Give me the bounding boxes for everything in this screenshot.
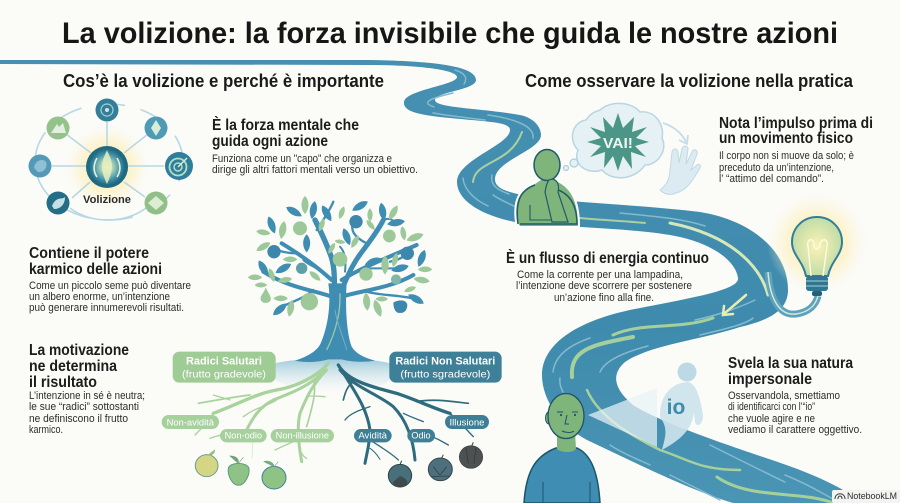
icon: hand bbox=[660, 146, 700, 194]
text block: impulso: un movimento fisico bbox=[719, 130, 853, 147]
volition diagram bbox=[28, 98, 193, 220]
observation cone bbox=[588, 388, 657, 447]
text block: impersonale: vediamo il carattere oggettivo. bbox=[728, 424, 862, 436]
pill: Non-illusione: Non-illusione bbox=[276, 431, 329, 441]
text block: impersonale: Osservandola, smettiamo bbox=[728, 390, 840, 402]
text block: potere karmico: può generare innumerevoli risultati. bbox=[29, 302, 184, 314]
trunk bbox=[295, 283, 375, 362]
apple: green bbox=[262, 461, 286, 489]
pill: Non-odio: Non-odio bbox=[225, 431, 262, 441]
panel: healthy roots label: (frutto gradevole) bbox=[182, 369, 266, 380]
text block: forza mentale bbox=[212, 117, 418, 176]
text block: forza mentale: guida ogni azione bbox=[212, 133, 328, 150]
text block: flusso: Come la corrente per una lampadina, bbox=[517, 269, 683, 281]
text block: motivazione bbox=[29, 342, 145, 436]
burst label: VAI! bbox=[603, 135, 633, 152]
text block: forza mentale: È la forza mentale che bbox=[212, 117, 359, 134]
figure: ghost self bbox=[660, 362, 703, 450]
panel: unhealthy roots label bbox=[389, 352, 502, 383]
node: top right bbox=[144, 116, 168, 140]
text block: potere karmico: karmico delle azioni bbox=[29, 261, 162, 278]
text block: forza mentale: Funziona come un "capo" che organizza e bbox=[212, 153, 392, 165]
pill: Odio: Odio bbox=[411, 431, 431, 441]
heading: right section: Come osservare la volizione nella pratica bbox=[525, 70, 854, 91]
icon: light bulb bbox=[767, 193, 867, 314]
watermark: NotebookLM bbox=[847, 491, 897, 501]
node: bottom right bbox=[144, 192, 168, 214]
text block: impersonale: che vuole agire e ne bbox=[728, 413, 815, 425]
text block: motivazione: La motivazione bbox=[29, 342, 129, 359]
text block: flusso: l’intenzione deve scorrere per sostenere bbox=[516, 280, 692, 292]
pill: Non-odio bbox=[220, 429, 267, 442]
unhealthy roots bbox=[338, 365, 473, 463]
text block: flusso: È un flusso di energia continuo bbox=[506, 250, 709, 267]
panel: healthy roots label bbox=[173, 352, 276, 383]
text block: impersonale: Svela la sua natura bbox=[728, 355, 853, 372]
node: bottom left bbox=[46, 192, 70, 214]
blue leaves bbox=[256, 198, 428, 318]
text block: motivazione: le sue “radici” sottostanti bbox=[29, 401, 139, 413]
text block: motivazione: ne determina bbox=[29, 358, 117, 375]
soil haze bbox=[275, 358, 390, 392]
green leaves bbox=[248, 196, 432, 318]
arrow: energy flow bbox=[723, 295, 746, 315]
text block: impulso: preceduto da un’intenzione, bbox=[719, 162, 834, 174]
apple: black rotten bbox=[459, 442, 483, 468]
text block: potere karmico: un albero enorme, un’intenzione bbox=[29, 291, 170, 303]
apple: dark teal bbox=[388, 461, 412, 487]
text block: motivazione: ne definiscono il frutto bbox=[29, 413, 128, 425]
panel: healthy roots label: Radici Salutari bbox=[186, 356, 262, 368]
text block: impulso: l’ “attimo del comando”. bbox=[719, 173, 824, 185]
text block: motivazione: karmico. bbox=[29, 424, 63, 436]
node: right target bbox=[165, 152, 193, 180]
text block: impersonale bbox=[728, 355, 862, 436]
pill: Non-avidità: Non-avidità bbox=[167, 417, 215, 427]
pill: Avidità: Avidità bbox=[358, 431, 388, 441]
text block: motivazione: il risultato bbox=[29, 374, 97, 391]
figure: thinking person bbox=[516, 150, 578, 226]
text block: potere karmico bbox=[29, 245, 191, 314]
text block: impulso: Nota l’impulso prima di bbox=[719, 115, 873, 132]
label: io: io bbox=[667, 396, 685, 419]
thought cloud with VAI bbox=[564, 103, 664, 178]
heading: left section: Cos’è la volizione e perché è importante bbox=[63, 70, 384, 91]
figure: observing person bbox=[524, 394, 600, 503]
apple: yellow bbox=[195, 449, 218, 477]
tree with roots bbox=[162, 196, 502, 489]
apple: dark withered bbox=[428, 455, 452, 481]
pill: Illusione: Illusione bbox=[449, 417, 484, 427]
starburst bbox=[587, 113, 649, 171]
watermark bbox=[832, 490, 900, 503]
pill: Non-illusione bbox=[271, 429, 334, 442]
node: top left bbox=[46, 116, 70, 140]
node: left bbox=[28, 154, 52, 178]
text block: flusso bbox=[506, 250, 709, 304]
text block: potere karmico: Contiene il potere bbox=[29, 245, 149, 262]
apple: green bbox=[228, 456, 249, 485]
text block: potere karmico: Come un piccolo seme può diventare bbox=[29, 280, 191, 292]
fruits bbox=[261, 215, 414, 313]
text block: flusso: un’azione fino alla fine. bbox=[554, 292, 654, 304]
branches bbox=[263, 202, 417, 310]
node: top bbox=[96, 98, 118, 122]
text block: forza mentale: dirige gli altri fattori mentali verso un obiettivo. bbox=[212, 164, 418, 176]
pill: Illusione bbox=[445, 415, 489, 429]
text block: impersonale: impersonale bbox=[728, 371, 812, 388]
panel: unhealthy roots label: Radici Non Salutari bbox=[395, 356, 495, 368]
panel: unhealthy roots label: (frutto sgradevole) bbox=[400, 369, 490, 380]
central core bbox=[86, 146, 128, 188]
text block: impulso: Il corpo non si muove da solo; è bbox=[719, 150, 854, 162]
central label: Volizione bbox=[83, 194, 131, 206]
pill: Non-avidità bbox=[162, 415, 219, 429]
text block: impersonale: di identificarci con l’“io” bbox=[728, 401, 815, 413]
title: La volizione: la forza invisibile che guida le nostre azioni bbox=[62, 17, 838, 50]
text block: impulso bbox=[719, 115, 873, 185]
pill: Avidità bbox=[354, 429, 392, 442]
healthy roots bbox=[195, 363, 328, 462]
pill: Odio bbox=[407, 429, 435, 442]
arrow: thought to hand bbox=[663, 123, 688, 144]
text block: motivazione: L’intenzione in sé è neutra; bbox=[29, 390, 145, 402]
